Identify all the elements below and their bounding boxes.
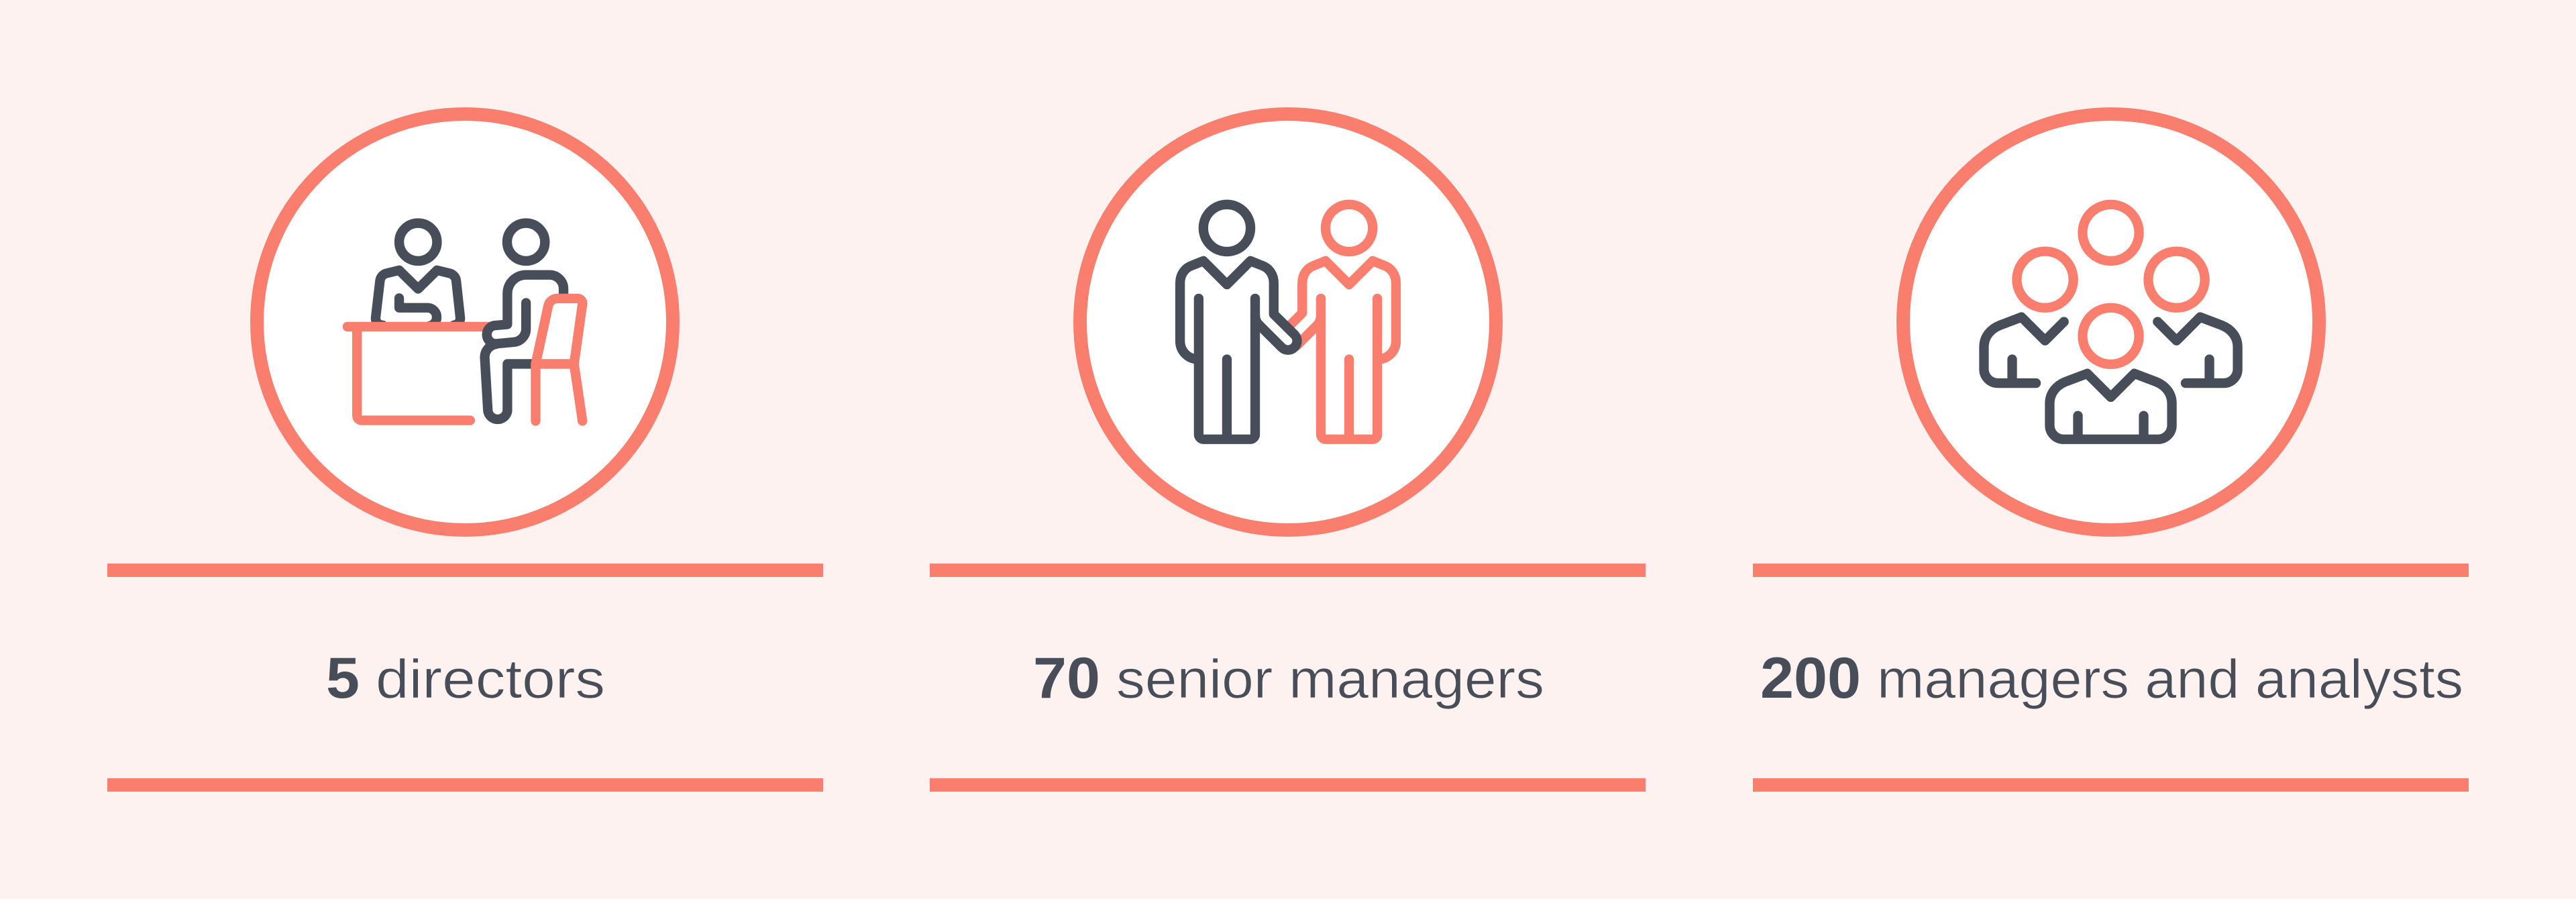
label: 5 directors: directors (376, 649, 605, 710)
bottom rule (930, 778, 1646, 792)
label: 200 managers and analysts: managers and analysts (1877, 649, 2463, 710)
panel: managers and analysts (1753, 114, 2469, 792)
bottom rule (107, 778, 823, 792)
bottom rule (1753, 778, 2469, 792)
label: 200 managers and analysts: 200 (1760, 646, 1861, 710)
top rule (1753, 564, 2469, 577)
label: 70 senior managers: 70 (1033, 646, 1100, 710)
panel: senior managers (930, 114, 1646, 792)
label: 70 senior managers: senior managers (1116, 649, 1544, 710)
top rule (107, 564, 823, 577)
panel: directors (107, 114, 823, 792)
icon: two people at a desk (257, 114, 673, 530)
icon: group of four people (1903, 114, 2319, 530)
icon: two people shaking hands (1080, 114, 1496, 530)
label: 5 directors: 5 (326, 646, 360, 710)
top rule (930, 564, 1646, 577)
